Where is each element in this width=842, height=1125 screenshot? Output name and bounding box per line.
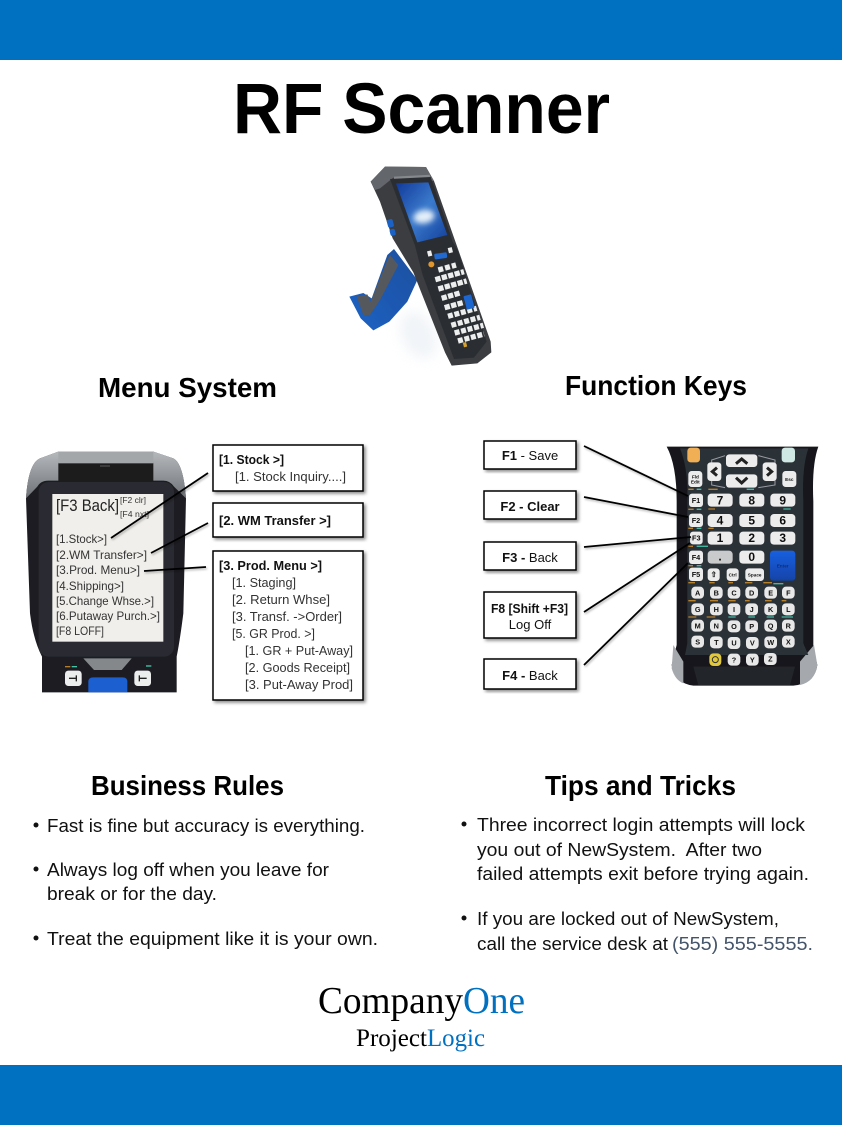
tips bullet list: If you are locked out of NewSystem,: [477, 909, 779, 929]
icon: scanner keypad: X: [786, 637, 791, 646]
icon: scanner keypad: J: [750, 605, 754, 614]
icon: scanner keypad: E: [768, 588, 773, 597]
icon: scanner keypad: 1: [717, 531, 724, 545]
callout: F4 back: F4 - Back: [502, 668, 558, 683]
screen menu text: [F4 nxt]: [120, 509, 149, 519]
arrow: menu connectors: [111, 473, 208, 571]
tips bullet list: failed attempts exit before trying again.: [477, 864, 809, 884]
tips bullet list: (555) 555-5555.: [672, 934, 813, 954]
tips bullet list: call the service desk at: [477, 934, 668, 954]
icon: scanner keypad: F3: [692, 534, 701, 543]
callout: F8 log off: Log Off: [509, 617, 552, 632]
callout: WM transfer menu: [2. WM Transfer >]: [219, 513, 331, 528]
icon: scanner keypad: F: [786, 588, 791, 597]
icon: scanner keypad: 2: [748, 531, 755, 545]
rules bullet list: Always log off when you leave for: [47, 860, 329, 880]
callout: production menu: [3. Put-Away Prod]: [245, 677, 353, 692]
icon: scanner keypad: 9: [779, 493, 786, 507]
screen menu text: [F3 Back]: [56, 496, 119, 515]
icon: scanner keypad: K: [768, 605, 774, 614]
screen menu text: [2.WM Transfer>]: [56, 548, 147, 562]
callout: stock menu: [1. Stock >]: [219, 452, 284, 467]
icon: scanner keypad: N: [714, 621, 719, 630]
logo: CompanyOne ProjectLogic: Logic: [427, 1025, 485, 1052]
icon: scanner keypad: P: [749, 622, 754, 631]
icon: scanner keypad: T: [714, 638, 719, 647]
rules bullet list: [34, 816, 378, 949]
arrow: function key connectors: [584, 446, 691, 665]
screen menu text: [3.Prod. Menu>]: [56, 563, 140, 577]
icon: scanner keypad: ⇧: [711, 570, 717, 579]
panel: function keys: [484, 441, 818, 689]
screen menu text: [F8 LOFF]: [56, 624, 104, 638]
logo: CompanyOne ProjectLogic: [318, 980, 525, 1052]
icon: scanner keypad: F2: [692, 516, 700, 525]
icon: scanner keypad: Ctrl: [729, 572, 737, 577]
icon: scanner keypad: 7: [717, 493, 724, 507]
icon: scanner keypad: H: [714, 605, 719, 614]
icon: scanner keypad: Enter: [777, 564, 789, 569]
callout: production menu: [2. Goods Receipt]: [245, 660, 350, 675]
icon: scanner keypad: C: [731, 588, 737, 597]
callout: F8 log off: F8 [Shift +F3]: [491, 601, 568, 616]
icon: scanner keypad: G: [695, 605, 701, 614]
callout: WM transfer menu: [213, 503, 363, 537]
heading: Function Keys: Function Keys: [565, 370, 747, 401]
tips bullet list: Three incorrect login attempts will lock: [477, 815, 806, 835]
callout: stock menu: [213, 445, 363, 491]
callout: F2 clear: [484, 491, 576, 519]
callout: production menu: [1. Staging]: [232, 575, 296, 590]
callout: F1 save: F1 - Save: [502, 448, 558, 463]
tips bullet list: you out of NewSystem. After two: [477, 840, 762, 860]
panel: business rules: [34, 770, 378, 949]
icon: scanner keypad: I: [733, 605, 735, 614]
icon: scanner keypad: 0: [748, 550, 755, 564]
icon: scanner keypad: V: [750, 639, 755, 648]
screen menu text: [4.Shipping>]: [56, 579, 124, 593]
panel: tips and tricks: [462, 770, 813, 954]
icon: scanner screen device: [26, 452, 186, 692]
icon: scanner keypad: O: [731, 622, 737, 631]
icon: scanner keypad: M: [695, 621, 701, 630]
icon: scanner keypad: W: [767, 638, 774, 647]
icon: handheld RF scanner photo: [349, 167, 491, 366]
heading: Menu System: Menu System: [98, 372, 277, 403]
icon: scanner keypad: Esc: [785, 477, 794, 482]
callout: production menu: [3. Transf. ->Order]: [232, 609, 342, 624]
icon: scanner keypad: .: [718, 549, 722, 563]
icon: scanner keypad: Z: [768, 655, 773, 664]
icon: scanner keypad: F4: [692, 553, 701, 562]
icon: scanner keypad: Space: [748, 572, 762, 577]
icon: scanner keypad: B: [714, 588, 719, 597]
logo: CompanyOne ProjectLogic: One: [463, 980, 525, 1022]
icon: scanner keypad: Q: [768, 621, 774, 630]
tips bullet list: [462, 815, 813, 954]
icon: scanner keypad: ?: [732, 655, 737, 664]
callout: F2 clear: F2 - Clear: [500, 499, 560, 514]
rules bullet list: break or for the day.: [47, 884, 217, 904]
rules bullet list: Fast is fine but accuracy is everything.: [47, 816, 365, 836]
icon: scanner keypad: 4: [717, 513, 724, 527]
icon: scanner keypad: Fld: [692, 474, 699, 479]
callout: production menu: [3. Prod. Menu >]: [219, 558, 322, 573]
icon: scanner keypad: F1: [692, 496, 700, 505]
panel: menu system: [26, 445, 363, 700]
icon: scanner keypad: L: [786, 605, 791, 614]
callout: F3 back: F3 - Back: [502, 550, 558, 565]
icon: scanner keypad: U: [731, 639, 737, 648]
rules bullet list: Treat the equipment like it is your own.: [47, 929, 378, 949]
icon: scanner keypad: S: [695, 637, 700, 646]
callout: production menu: [1. GR + Put-Away]: [245, 643, 353, 658]
heading: Business Rules: Business Rules: [91, 770, 284, 801]
callout: F4 back: [484, 659, 576, 689]
screen menu text: [1.Stock>]: [56, 532, 107, 546]
callout: F3 back: [484, 542, 576, 570]
title: RF Scanner: [233, 70, 610, 149]
icon: scanner keypad: 5: [748, 513, 755, 527]
icon: scanner keypad: [667, 447, 818, 686]
logo: CompanyOne ProjectLogic: Company: [318, 980, 463, 1022]
screen menu text: [5.Change Whse.>]: [56, 594, 154, 608]
screen menu text: [6.Putaway Purch.>]: [56, 609, 160, 623]
callout: production menu: [213, 551, 363, 700]
icon: scanner keypad: Y: [750, 655, 755, 664]
icon: scanner keypad: 6: [779, 513, 786, 527]
icon: scanner keypad: 8: [748, 493, 755, 507]
callout: production menu: [5. GR Prod. >]: [232, 626, 315, 641]
callout: stock menu: [1. Stock Inquiry....]: [235, 469, 346, 484]
callout: F8 log off: [484, 592, 576, 638]
logo: CompanyOne ProjectLogic: Project: [356, 1025, 427, 1052]
icon: scanner keypad: A: [695, 588, 701, 597]
callout: F1 save: [484, 441, 576, 469]
icon: scanner keypad: Edit: [691, 480, 700, 485]
callout: production menu: [2. Return Whse]: [232, 592, 330, 607]
icon: scanner keypad: D: [749, 588, 754, 597]
top blue bar: [0, 0, 842, 60]
icon: scanner keypad: 3: [779, 531, 786, 545]
screen menu text: [F2 clr]: [120, 495, 146, 505]
bottom blue bar: [0, 1065, 842, 1125]
screen menu text: [56, 495, 160, 638]
icon: scanner keypad: F5: [692, 570, 700, 579]
icon: scanner keypad: R: [786, 621, 792, 630]
heading: Tips and Tricks: Tips and Tricks: [545, 770, 736, 801]
